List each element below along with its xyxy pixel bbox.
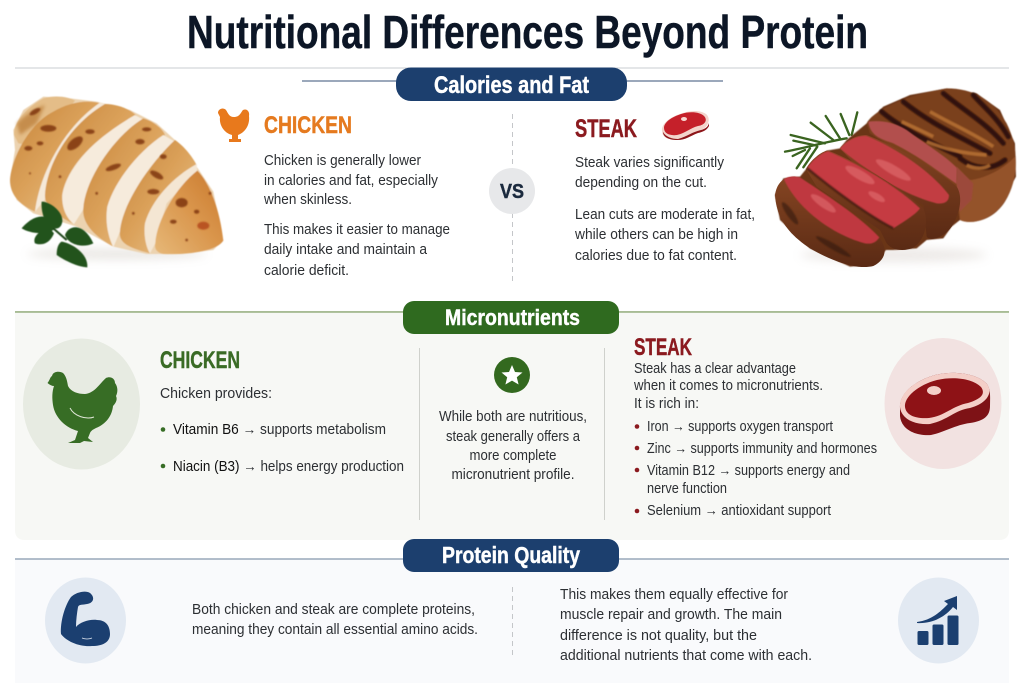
- title: Nutritional Differences Beyond Protein: [187, 6, 868, 58]
- protein text right: muscle repair and growth. The main: [560, 607, 782, 623]
- center summary text: [439, 409, 587, 483]
- center summary text: micronutrient profile.: [452, 467, 574, 483]
- center summary text: steak generally offers a: [446, 429, 581, 445]
- chicken heading: CHICKEN: [264, 112, 352, 139]
- steak micronutrients: Iron → supports oxygen transport: [647, 419, 833, 435]
- icon: flexed arm: [45, 578, 126, 664]
- protein text right: difference is not quality, but the: [560, 628, 757, 644]
- protein text right: additional nutrients that come with each.: [560, 648, 812, 664]
- steak calories text: Lean cuts are moderate in fat,: [575, 207, 755, 223]
- steak calories text: while others can be high in: [574, 227, 738, 243]
- icon: red steak: [662, 111, 709, 140]
- steak micronutrients: when it comes to micronutrients.: [633, 378, 823, 394]
- image: sliced chicken breast: [10, 97, 223, 267]
- icon: orange chicken: [218, 109, 249, 142]
- steak calories text: depending on the cut.: [575, 175, 707, 191]
- chicken micronutrients: [160, 347, 404, 475]
- protein text right: This makes them equally effective for: [560, 587, 788, 603]
- icon: rising bar chart: [898, 578, 979, 664]
- section header: Protein Quality: Protein Quality: [442, 542, 580, 568]
- chicken calories text: This makes it easier to manage: [264, 222, 450, 238]
- steak heading: STEAK: [575, 115, 637, 143]
- steak micronutrients: nerve function: [647, 481, 727, 497]
- section header: Micronutrients: Micronutrients: [445, 305, 580, 330]
- steak micronutrients: Selenium → antioxidant support: [647, 503, 831, 519]
- chicken calories text: in calories and fat, especially: [264, 173, 439, 189]
- steak micronutrients: Vitamin B12 → supports energy and: [647, 463, 850, 479]
- steak micronutrients: It is rich in:: [634, 396, 699, 412]
- steak calories text: calories due to fat content.: [575, 248, 737, 264]
- icon: steak cut: [884, 338, 1002, 469]
- chicken micronutrients: CHICKEN: [160, 347, 240, 374]
- section header: Protein Quality: [403, 539, 619, 572]
- center summary text: While both are nutritious,: [439, 409, 587, 425]
- panel: protein quality: [15, 539, 1009, 683]
- chicken micronutrients: Vitamin B6 → supports metabolism: [173, 422, 386, 438]
- slice B: [806, 151, 926, 250]
- slice A: [840, 135, 960, 239]
- section header: Calories and Fat: Calories and Fat: [434, 72, 589, 99]
- chicken calories text: daily intake and maintain a: [264, 242, 428, 258]
- chicken micronutrients: Niacin (B3) → helps energy production: [173, 459, 404, 475]
- VS badge: [489, 168, 535, 214]
- protein text left: meaning they contain all essential amino acids.: [192, 622, 478, 638]
- steak micronutrients: Steak has a clear advantage: [634, 361, 796, 377]
- panel: micronutrients: [15, 301, 1009, 540]
- icon: star badge: [494, 357, 530, 393]
- slice C: [775, 177, 885, 267]
- center summary text: more complete: [470, 448, 556, 464]
- parsley garnish: [22, 202, 93, 267]
- section header: Micronutrients: [403, 301, 619, 334]
- steak micronutrients: [633, 334, 877, 519]
- chicken micronutrients: Chicken provides:: [160, 386, 272, 402]
- rosemary sprig: [785, 112, 857, 168]
- steak micronutrients: Zinc → supports immunity and hormones: [647, 441, 877, 457]
- section header: Calories and Fat: [396, 68, 627, 101]
- icon: green hen: [23, 338, 140, 470]
- VS badge: VS: [500, 181, 524, 203]
- steak micronutrients: STEAK: [634, 334, 692, 361]
- image: sliced grilled steak: [775, 88, 1016, 267]
- steak calories text: [574, 155, 755, 264]
- steak calories text: Steak varies significantly: [575, 155, 725, 171]
- chicken calories text: [263, 153, 450, 279]
- protein text left: Both chicken and steak are complete proteins,: [192, 602, 475, 618]
- chicken calories text: calorie deficit.: [264, 263, 349, 279]
- chicken calories text: Chicken is generally lower: [264, 153, 421, 169]
- chicken calories text: when skinless.: [263, 192, 352, 208]
- protein text left: [192, 602, 478, 638]
- protein text right: [560, 587, 812, 664]
